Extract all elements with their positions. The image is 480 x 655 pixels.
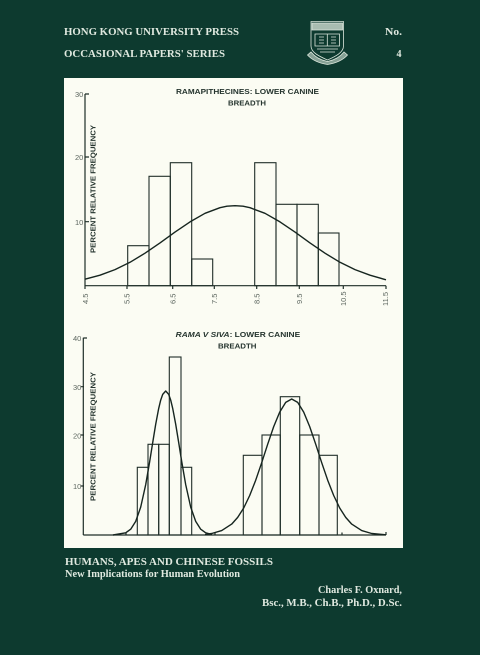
chart title: BREADTH [228,98,266,108]
chart title: BREADTH [218,342,256,350]
x axis [83,532,386,535]
left normal curve [113,391,212,535]
white chart panel [64,78,403,548]
icon: university crest [308,22,348,64]
y axis and ticks: 10 [75,218,83,227]
left histogram bars [137,357,192,535]
book subtitle: New Implications for Human Evolution [65,569,240,580]
x axis and ticks: 5.5 [122,294,132,304]
chart: Rama v Siva histogram [73,330,386,535]
y axis and ticks: 40 [73,334,81,343]
author name: Charles F. Oxnard, [318,585,402,596]
chart: Ramapithecines histogram [75,87,390,306]
normal curve [85,206,386,280]
chart title [176,330,300,350]
x axis and ticks: 6.5 [168,294,178,304]
header: number value: 4 [396,49,402,60]
x axis and ticks: 9.5 [295,294,304,304]
header: series: OCCASIONAL PAPERS' SERIES [64,49,225,60]
chart title [176,87,319,108]
x axis and ticks: 10.5 [339,291,348,306]
right normal curve [205,399,386,535]
x axis and ticks [81,286,390,306]
y axis and ticks: 30 [75,90,83,99]
y axis label: PERCENT RELATIVE FREQUENCY [88,372,98,501]
y axis and ticks [73,334,87,535]
y axis label: PERCENT RELATIVE FREQUENCY [88,125,98,253]
x axis and ticks: 4.5 [81,294,90,304]
header: number label: No. [385,27,403,38]
y axis and ticks: 20 [73,432,81,440]
right histogram bars [243,397,337,535]
histogram bars [128,163,339,286]
y axis and ticks: 30 [73,383,81,392]
book title: HUMANS, APES AND CHINESE FOSSILS [65,557,273,568]
x axis and ticks: 8.5 [252,294,262,304]
y axis and ticks [75,90,89,286]
y axis and ticks: 20 [75,153,83,162]
chart title: RAMA V SIVA : LOWER CANINE [176,330,300,339]
y axis and ticks: 10 [73,482,81,491]
header: publisher: HONG KONG UNIVERSITY PRESS [64,27,239,38]
chart title: RAMAPITHECINES: LOWER CANINE [176,87,319,96]
author credentials: Bsc., M.B., Ch.B., Ph.D., D.Sc. [262,598,403,609]
x axis and ticks: 11.5 [381,292,390,306]
x axis and ticks: 7.5 [210,294,219,304]
